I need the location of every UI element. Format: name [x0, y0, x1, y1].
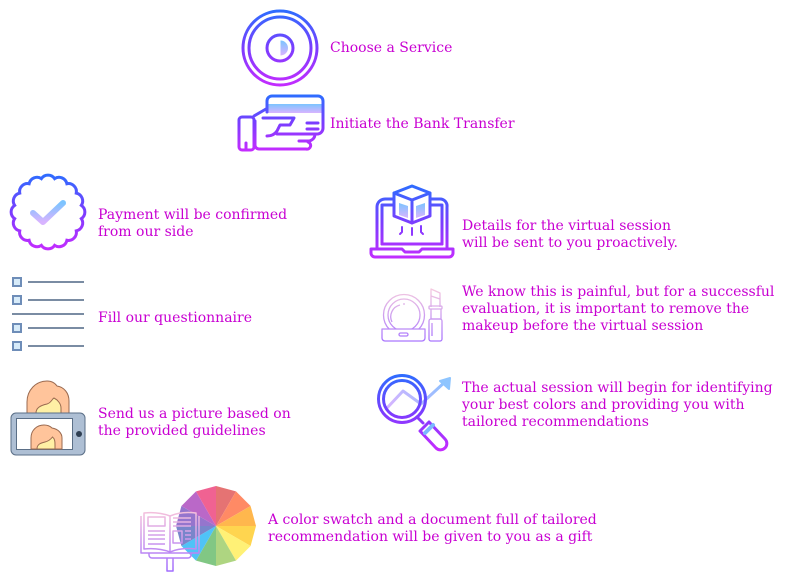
label: payment confirmed: from our side	[98, 224, 194, 240]
label: payment confirmed: Payment will be confirmed	[98, 207, 287, 223]
label: the actual session: your best colors and providing you with	[461, 397, 745, 413]
label: colour swatch gift: recommendation will be given to you as a gift	[268, 529, 593, 545]
label: send a picture: the provided guidelines	[98, 423, 266, 439]
label: fill questionnaire: Fill our questionnaire	[98, 310, 252, 326]
icon: open book document	[141, 513, 199, 571]
label: the actual session: The actual session will begin for identifying	[462, 380, 773, 396]
icon: service dial	[243, 11, 317, 85]
icon: makeup compact and lipstick	[382, 289, 442, 341]
icon: laptop with box	[371, 186, 453, 257]
icon: colour wheel	[176, 486, 256, 566]
icon: questionnaire	[12, 278, 84, 350]
icon: confirmed badge	[11, 175, 85, 249]
icon: magnifier with trend	[378, 376, 450, 450]
label: send a picture: Send us a picture based on	[98, 406, 291, 422]
label: details for the virtual session: Details for the virtual session	[462, 218, 671, 234]
icon: picture on phone	[11, 381, 85, 455]
label: choose a service: Choose a Service	[330, 40, 452, 56]
label: initiate the bank transfer: Initiate the Bank Transfer	[330, 116, 515, 132]
label: remove the makeup: evaluation, it is important to remove the	[462, 301, 749, 317]
label: remove the makeup: makeup before the virtual session	[462, 318, 703, 334]
label: the actual session: tailored recommendations	[462, 414, 649, 430]
label: remove the makeup: We know this is painful, but for a successful	[462, 284, 774, 300]
label: details for the virtual session: will be sent to you proactively.	[462, 235, 678, 251]
icon: bank card and hand	[239, 96, 323, 150]
label: colour swatch gift: A color swatch and a document full of tailored	[268, 512, 597, 528]
